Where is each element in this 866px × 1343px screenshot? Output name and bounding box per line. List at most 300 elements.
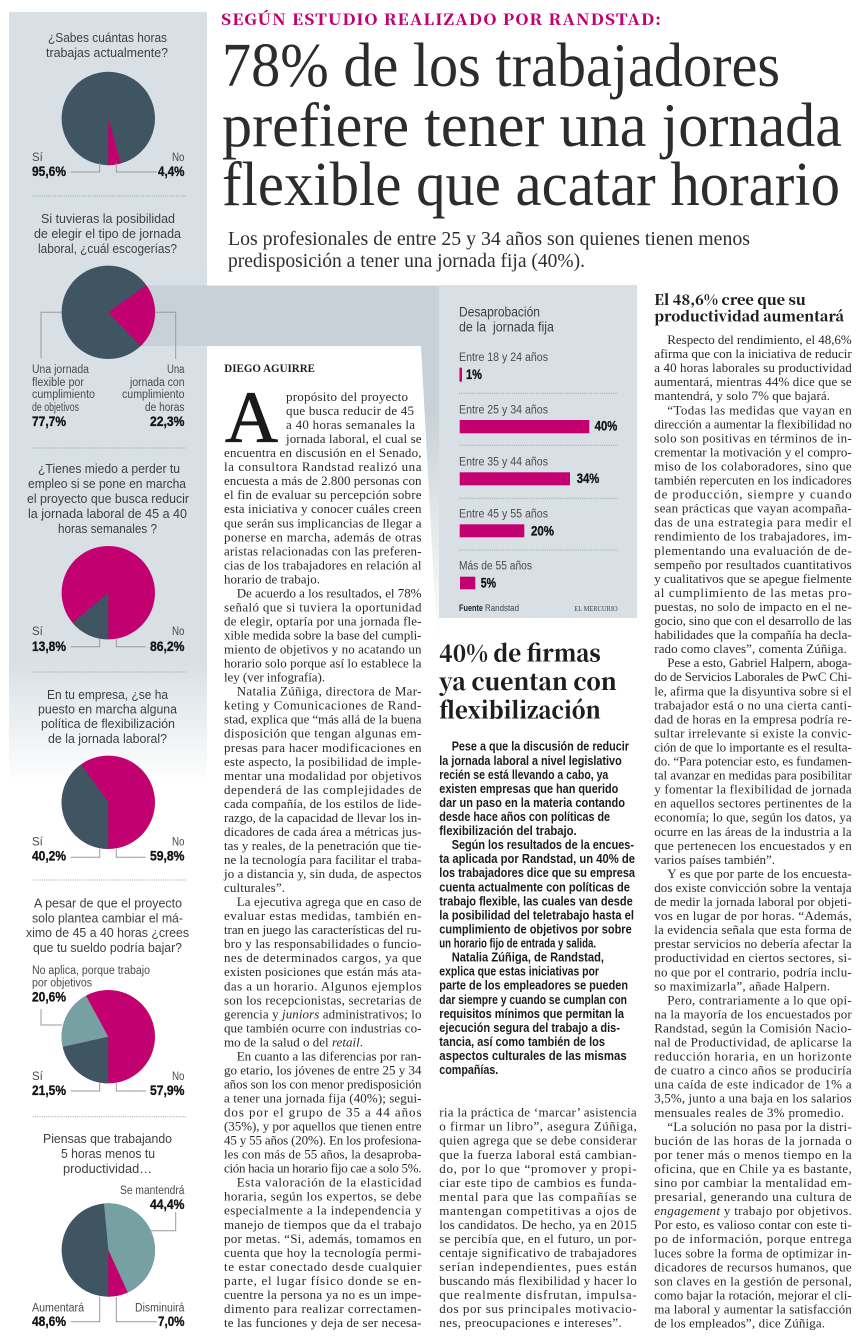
bold intro text <box>439 740 636 1077</box>
bar: 18 to 24 <box>459 352 548 382</box>
paragraph: Halpern: que pertenecen los encuestados y en <box>654 838 852 853</box>
paragraph: closing quote: sino por cambiar la mentalidad em- <box>654 1175 852 1190</box>
paragraph: quote: “Todas las medidas que vayan en <box>667 402 852 417</box>
labels pie 5: 20,6% <box>32 990 66 1005</box>
paragraph: Halpern: Pese a esto, Gabriel Halpern, aboga- <box>667 655 852 670</box>
source note: Randstad <box>485 603 519 613</box>
paragraph: quote: dirección a aumentar la flexibilidad no <box>654 416 852 431</box>
paragraph 3: mentar una modalidad por objetivos <box>224 768 422 783</box>
paragraph 4: La ejecutiva agrega que en caso de <box>237 894 422 909</box>
labels pie 4 <box>32 837 184 864</box>
paragraph 2: horario solo porque así lo establece la <box>224 656 422 671</box>
paragraph: Halpern: tal avanzar en medidas para posibilitar <box>654 768 852 783</box>
question 5 <box>26 896 189 955</box>
paragraph 3: este aspecto, la posibilidad de imple- <box>224 754 422 769</box>
paragraph: quote: sean prácticas que vayan acompaña- <box>654 501 852 516</box>
bar: over 55 <box>459 560 532 590</box>
paragraph 3: Natalia Zúñiga, directora de Mar- <box>237 684 422 699</box>
paragraph: convicción: de medir la jornada laboral por objeti- <box>654 894 852 909</box>
paragraph 6: manejo de tiempos que da el trabajo <box>224 1217 422 1232</box>
pie chart 4 <box>62 756 155 849</box>
paragraph: convicción: vos en lugar de por horas. “Además, <box>654 908 852 923</box>
paragraph: convicción: prestar servicios no debería afectar la <box>654 936 852 951</box>
paragraph 3: dependerá de las complejidades de <box>224 782 422 797</box>
paragraph 1: esta iniciativa y conocer cuáles creen <box>224 501 422 516</box>
continuation of article: ciar este tipo de cambios es funda- <box>439 1175 637 1190</box>
bar: 18 to 24: Entre 18 y 24 años <box>459 352 548 364</box>
paragraph 1 <box>224 389 422 586</box>
bold intro text: trabajo flexible, las cuales van desde <box>439 894 633 908</box>
labels pie 2: Una jornada <box>32 364 90 376</box>
survey 1: hours worked <box>32 30 184 179</box>
labels pie 1: No <box>172 152 184 164</box>
paragraph: Halpern: le, afirma que la disyuntiva sobre si el <box>654 683 852 698</box>
question 1: trabajas actualmente? <box>46 45 168 60</box>
bold intro text: Según los resultados de la encues- <box>452 838 634 852</box>
labels pie 6: 44,4% <box>150 1197 184 1212</box>
labels pie 2: de horas <box>145 402 185 414</box>
paragraph 3: keting y Comunicaciones de Rand- <box>224 698 422 713</box>
section heading: 40% de firmas: 40% de firmas <box>439 636 601 669</box>
labels pie 5: 21,5% <box>32 1083 66 1098</box>
paragraph: Comisión Nacional: de cuatro a cinco años se produciría <box>654 1063 852 1078</box>
paragraph: closing quote: como bajar la rotación, mejorar el cli- <box>654 1287 852 1302</box>
connector band from pie to bar chart panel <box>130 286 440 640</box>
bar: 45 to 55 <box>459 508 554 538</box>
subtitle: Los profesionales de entre 25 y 34 años son quienes tienen menos <box>228 228 750 250</box>
paragraph 5: go etario, los jóvenes de entre 25 y 34 <box>224 1062 422 1077</box>
bar: 35 to 44 <box>459 456 599 486</box>
question 5: que tu sueldo podría bajar? <box>33 940 182 955</box>
bold intro text: aspectos culturales de las mismas <box>439 1049 627 1063</box>
panel: left survey column background <box>9 12 207 785</box>
continuation of article: nes, preocupaciones e intereses”. <box>439 1315 622 1330</box>
bold intro text: tancia, así como también de los <box>439 1035 605 1049</box>
question 3: ¿Tienes miedo a perder tu <box>38 461 180 476</box>
paragraph 3: tas y reales, de la penetración que tie- <box>224 838 422 853</box>
paragraph: rendimiento: afirma que con la iniciativa de reducir <box>654 346 852 361</box>
article column 3 <box>654 289 852 1330</box>
pie chart 3 <box>62 546 155 639</box>
paragraph 6: parte, el lugar físico donde se en- <box>224 1273 422 1288</box>
paragraph: Halpern: sultar irrelevante si existe la convic- <box>654 725 852 740</box>
paragraph 4: que también ocurre con industrias co- <box>224 1020 422 1035</box>
paragraph: Comisión Nacional: 3,5%, junto a una baja en los salarios <box>654 1091 852 1106</box>
continuation of article: quien agrega que se debe considerar <box>439 1133 637 1148</box>
paragraph 4: gerencia y juniors administrativos; lo <box>224 1006 422 1021</box>
labels pie 3: No <box>172 626 184 638</box>
paragraph 4: evaluar estas medidas, también en- <box>224 908 422 923</box>
labels pie 2: flexible por <box>32 377 84 389</box>
paragraph: quote: das de una estrategia para medir el <box>654 515 852 530</box>
drop cap: A <box>225 377 278 458</box>
question 6: productividad… <box>63 1161 152 1176</box>
paragraph 3: presas para hacer modificaciones en <box>224 740 422 755</box>
section heading: productivity: El 48,6% cree que su <box>654 289 806 310</box>
labels pie 6: Aumentará <box>32 1303 85 1315</box>
paragraph 5: años son los con menor predisposición <box>224 1076 422 1092</box>
labels pie 2: cumplimiento <box>32 389 95 401</box>
pie chart 2 <box>62 266 155 359</box>
question 5: ximo de 45 a 40 horas ¿crees <box>26 925 189 940</box>
labels pie 6: 48,6% <box>32 1314 66 1329</box>
paragraph: Halpern: varios países también”. <box>654 852 775 867</box>
survey 5: salary <box>26 896 189 1098</box>
survey 4: flexibility policy <box>32 687 184 864</box>
paragraph 4: son los recepcionistas, secretarias de <box>224 992 422 1007</box>
paragraph 4: tran en juego las características del ru- <box>224 922 422 937</box>
paragraph: closing quote: son claves en la gestión de personal, <box>654 1273 852 1288</box>
paragraph: convicción: Y es que por parte de los encuesta- <box>667 866 852 881</box>
paragraph: Halpern: ción de que lo importante es el resulta- <box>654 740 852 754</box>
labels pie 3: 13,8% <box>32 639 66 654</box>
paragraph 3: cada compañía, de los estilos de lide- <box>224 796 422 811</box>
question 6 <box>43 1131 172 1176</box>
labels pie 6: 7,0% <box>158 1314 184 1329</box>
bar: 35 to 44: Entre 35 y 44 años <box>459 456 548 468</box>
paragraph: quote: rado como claves”, comenta Zúñiga. <box>654 641 847 656</box>
paragraph 2: miento de objetivos y no acatando un <box>224 642 422 656</box>
question 3: el proyecto que busca reducir <box>27 491 190 506</box>
bold intro text: cumplimiento de objetivos por sobre <box>439 922 632 936</box>
kicker heading: SEGÚN ESTUDIO REALIZADO POR RANDSTAD: <box>221 8 662 30</box>
paragraph 1: ponerse en marcha, además de otras <box>224 529 422 544</box>
labels pie 6: Se mantendrá <box>120 1185 185 1197</box>
labels pie 2 <box>32 312 185 429</box>
paragraph: Halpern: economía; lo que, según los datos, ya <box>654 810 852 825</box>
paragraph 5: les con más de 55 años, la desaproba- <box>224 1147 422 1162</box>
continuation of article: los candidatos. De hecho, ya en 2015 <box>439 1217 637 1232</box>
paragraph 3: razgo, de la capacidad de llevar los in- <box>224 810 422 825</box>
pie chart 1 <box>62 72 155 165</box>
question 3: la jornada laboral de 45 a 40 <box>28 506 187 521</box>
paragraph 1: el fin de evaluar su percepción sobre <box>224 487 422 502</box>
bar: 25 to 34 <box>459 404 617 434</box>
pie chart 6 <box>62 1203 155 1297</box>
bold intro text: la posibilidad del teletrabajo hasta el <box>439 908 634 922</box>
continuation of article: do, por lo que “promover y propi- <box>439 1161 637 1176</box>
question 1: ¿Sabes cuántas horas <box>48 30 167 45</box>
paragraph 3: dicadores de cada área a métricas jus- <box>224 824 422 839</box>
bold intro text: parte de los empleadores se pueden <box>439 979 628 993</box>
byline: DIEGO AGUIRRE <box>224 363 315 375</box>
survey 6: productivity <box>32 1131 185 1329</box>
question 2: de elegir el tipo de jornada <box>34 226 182 241</box>
paragraph 5: ción hacia un horario fijo cae a solo 5%. <box>224 1161 422 1176</box>
panel: bar chart disapproval of fixed schedule <box>439 285 637 618</box>
pie chart 5 <box>62 990 155 1083</box>
labels pie 5: No aplica, porque trabajo <box>32 965 150 977</box>
title: prefiere tener una jornada <box>222 92 842 160</box>
bold intro text: la jornada laboral a nivel legislativo <box>439 754 622 768</box>
paragraph 1: que busca reducir de 45 <box>286 403 414 418</box>
bold intro text: dar un paso en la materia contando <box>439 796 625 810</box>
paragraph: quote: y cualitativos que se apegue fielmente <box>654 571 852 586</box>
paragraph 5: 45 y 55 años (20%). En los profesiona- <box>224 1133 422 1148</box>
continuation of article: que realmente disfrutan, impulsa- <box>439 1287 637 1302</box>
labels pie 1: 4,4% <box>158 164 184 179</box>
paragraph: quote: puestas, no solo de impacto en el ne- <box>654 599 852 614</box>
question 3: horas semanales ? <box>58 521 157 536</box>
paragraph: quote: habilidades que la compañía ha decla- <box>654 627 852 642</box>
paragraph: Halpern: do. “Para potenciar esto, es fundamen- <box>654 754 852 768</box>
subtitle <box>228 228 750 272</box>
survey 3: fear of losing job <box>27 461 190 654</box>
paragraph: Comisión Nacional: Pero, contrariamente a lo que opi- <box>667 992 852 1007</box>
labels pie 5: por objetivos <box>32 978 92 990</box>
paragraph 4: das a un horario. Algunos ejemplos <box>224 978 422 993</box>
bold intro text: requisitos mínimos que permitan la <box>439 1007 625 1021</box>
paragraph: closing quote: “La solución no pasa por la distri- <box>667 1119 852 1134</box>
paragraph: closing quote: dicadores de recursos humanos, que <box>654 1259 852 1274</box>
labels pie 4: Sí <box>32 837 44 849</box>
paragraph 6: especialmente a la independencia y <box>224 1203 422 1218</box>
paragraph 6: cuenta que hoy la tecnología permi- <box>224 1245 422 1260</box>
labels pie 2: de objetivos <box>32 402 79 414</box>
bold intro text: un horario fijo de entrada y salida. <box>439 936 596 950</box>
labels pie 2: Una <box>167 364 185 376</box>
labels pie 1: Sí <box>32 152 44 164</box>
bold intro text: cuenta actualmente con políticas de <box>439 880 630 894</box>
section heading: productivity: productividad aumentará <box>654 306 844 327</box>
source note <box>459 603 618 613</box>
paragraph: convicción: so maximizarla”, añade Halpern. <box>654 978 830 993</box>
paragraph 3: stad, explica que “más allá de la buena <box>224 712 422 727</box>
paragraph 6: dimento para realizar correctamen- <box>224 1301 422 1316</box>
paragraph 5: dos por el grupo de 35 a 44 años <box>224 1104 422 1120</box>
paragraph 6: por metas. “Si, además, tomamos en <box>224 1231 422 1246</box>
paragraph 2: xible medida sobre la base del cumpli- <box>224 628 422 642</box>
paragraph 2: de elegir, optaría por una jornada fle- <box>224 614 422 628</box>
question 2: laboral, ¿cuál escogerías? <box>38 241 177 256</box>
paragraph: quote: sempeño por resultados cuantitativos <box>654 557 852 572</box>
subtitle: predisposición a tener una jornada fija (40%). <box>228 250 585 272</box>
bold intro text: ta aplicada por Randstad, un 40% de <box>439 852 635 866</box>
question 1 <box>46 30 168 60</box>
question 4: de la jornada laboral? <box>48 731 167 746</box>
paragraph: Comisión Nacional: reducción horaria, en un horizonte <box>654 1049 852 1064</box>
question 6: 5 horas menos tu <box>61 1146 155 1161</box>
question 4 <box>38 687 178 746</box>
bold intro text: Natalia Zúñiga, de Randstad, <box>452 951 604 965</box>
paragraph: quote <box>654 402 852 656</box>
paragraph: rendimiento: mantendrá, y solo 7% que bajará. <box>654 388 830 403</box>
bold intro text: existen empresas que han querido <box>439 782 619 796</box>
bold intro text: explica que estas iniciativas por <box>439 965 599 979</box>
paragraph: Halpern: ocurre en las áreas de la industria a la <box>654 824 852 839</box>
continuation of article: ria la práctica de ‘marcar’ asistencia <box>439 1105 637 1120</box>
paragraph: closing quote: oficina, que en Chile ya es bastante, <box>654 1161 852 1176</box>
continuation of article: o firmar un libro”, asegura Zúñiga, <box>439 1119 637 1134</box>
labels pie 6: Disminuirá <box>135 1303 185 1315</box>
paragraph 6: te estar conectado desde cualquier <box>224 1259 422 1274</box>
paragraph: closing quote: por tener más o menos tiempo en la <box>654 1147 852 1162</box>
paragraph: Halpern <box>654 655 852 867</box>
question 5: solo plantea cambiar el má- <box>32 911 183 926</box>
bar: 45 to 55: Entre 45 y 55 años <box>459 508 548 520</box>
paragraph 6: te las funciones y deja de ser necesa- <box>224 1315 422 1330</box>
paragraph 1: la consultora Randstad realizó una <box>224 459 422 474</box>
paragraph: convicción: la evidencia señala que esta forma de <box>654 922 852 937</box>
paragraph 3 <box>223 684 422 895</box>
paragraph: Comisión Nacional <box>654 992 852 1120</box>
labels pie 5: No <box>172 1071 184 1083</box>
bold intro text: los trabajadores dice que su empresa <box>439 866 636 880</box>
continuation of article: centaje significativo de trabajadores <box>439 1245 637 1260</box>
labels pie 2: cumplimiento <box>122 389 184 401</box>
paragraph: Halpern: en aquellos sectores pertinentes de la <box>654 796 852 811</box>
section heading: 40% de firmas <box>438 636 617 725</box>
paragraph: closing quote: ma laboral y aumentar la satisfacción <box>654 1302 852 1316</box>
question 2 <box>34 211 182 256</box>
paragraph: quote: rendimiento de los trabajadores, im- <box>654 529 852 544</box>
paragraph 3: culturales”. <box>224 880 285 895</box>
paragraph: convicción: no que por el contrario, podría inclu- <box>654 964 852 979</box>
question 4: puesto en marcha alguna <box>38 702 178 717</box>
paragraph 2: De acuerdo a los resultados, el 78% <box>237 585 422 600</box>
paragraph 4 <box>224 894 422 1049</box>
continuation of article: que la fuerza laboral está cambian- <box>439 1147 637 1162</box>
paragraph: rendimiento: Respecto del rendimiento, el 48,6% <box>667 332 852 347</box>
paragraph: quote: de producción, siempre y cuando <box>654 487 852 502</box>
paragraph: quote: también repercuten en los indicadores <box>654 472 852 488</box>
question 4: política de flexibilización <box>41 716 175 731</box>
section heading: 40% de firmas: flexibilización <box>439 692 601 725</box>
survey 2: preferred schedule <box>32 211 185 429</box>
paragraph 1: encuentra en discusión en el Senado, <box>224 445 422 460</box>
labels pie 4: 59,8% <box>150 849 184 864</box>
question 2: Si tuvieras la posibilidad <box>41 211 175 226</box>
article column 1 <box>223 363 422 1330</box>
paragraph 2: señaló que si tuviera la oportunidad <box>224 600 422 614</box>
bold intro text: recién se está llevando a cabo, ya <box>439 768 609 782</box>
paragraph: convicción <box>654 866 852 993</box>
paragraph 1: propósito del proyecto <box>286 389 408 404</box>
title <box>222 32 842 219</box>
paragraph: Comisión Nacional: mensuales reales de 3% promedio. <box>654 1105 844 1120</box>
labels pie 4: 40,2% <box>32 849 66 864</box>
labels pie 3: 86,2% <box>150 639 184 654</box>
bar chart title: de la jornada fija <box>459 320 554 335</box>
question 6: Piensas que trabajando <box>43 1131 172 1146</box>
continuation of article: mental para que las compañías se <box>439 1189 637 1204</box>
bold intro text: compañías. <box>439 1063 498 1077</box>
paragraph 6: Esta valoración de la elasticidad <box>237 1175 422 1190</box>
paragraph 4: nes de determinados cargos, ya que <box>224 950 422 965</box>
labels pie 2: jornada con <box>129 377 184 389</box>
bold intro text: Pese a que la discusión de reducir <box>452 740 629 754</box>
paragraph: closing quote: luces sobre la forma de optimizar in- <box>654 1245 852 1260</box>
paragraph 4: mo de la salud o del retail. <box>224 1034 363 1049</box>
bar: 45 to 55: 20% <box>531 523 554 538</box>
paragraph 5: a tener una jornada fija (40%); segui- <box>224 1090 422 1106</box>
paragraph 5 <box>224 1048 422 1176</box>
paragraph 1: encuesta a más de 2.800 personas con <box>224 473 422 488</box>
paragraph: closing quote: bución de las horas de la jornada o <box>654 1133 852 1148</box>
paragraph: closing quote: de los empleados”, dice Zúñiga. <box>654 1316 825 1330</box>
paragraph 3: disposición que tengan algunas em- <box>224 726 422 741</box>
question 3 <box>27 461 190 536</box>
source note: EL MERCURIO <box>574 604 618 613</box>
paragraph 6: cuentre la persona ya no es un impe- <box>224 1287 422 1302</box>
paragraph: closing quote <box>654 1119 852 1330</box>
continuation of article <box>439 1105 637 1330</box>
paragraph: quote: plementando una evaluación de de- <box>654 543 852 558</box>
labels pie 2: 22,3% <box>150 414 184 429</box>
paragraph: Halpern: trabajador está o no una cierta canti- <box>654 697 852 712</box>
section heading: productivity <box>654 289 844 327</box>
title: flexible que acatar horario <box>222 151 840 219</box>
paragraph 1: aristas relacionadas con las preferen- <box>224 543 422 558</box>
labels pie 1: 95,6% <box>32 164 66 179</box>
question 5: A pesar de que el proyecto <box>34 896 182 911</box>
section heading: 40% de firmas: ya cuentan con <box>438 664 617 697</box>
paragraph 2 <box>224 585 422 685</box>
labels pie 3: Sí <box>32 626 44 638</box>
paragraph 1: a 40 horas semanales la <box>286 417 415 432</box>
paragraph: closing quote: po de información, porque entrega <box>654 1231 852 1246</box>
paragraph: quote: solo son positivas en términos de in- <box>654 430 852 445</box>
continuation of article: mantengan competitivas a ojos de <box>439 1203 637 1218</box>
continuation of article: buscando más flexibilidad y hacer lo <box>439 1273 637 1288</box>
bar chart title: Desaprobación <box>459 305 540 320</box>
bar: 35 to 44: 34% <box>577 471 599 486</box>
bold intro text: ejecución segura del trabajo a dis- <box>439 1021 620 1035</box>
labels pie 5: Sí <box>32 1071 44 1083</box>
bar: over 55: Más de 55 años <box>459 560 532 572</box>
paragraph: closing quote: Por esto, es valioso contar con este ti- <box>654 1217 852 1232</box>
paragraph: closing quote: presarial, generando una cultura de <box>654 1189 852 1204</box>
paragraph: rendimiento: aumentará, mientras 44% dice que se <box>654 374 852 389</box>
source note: Fuente <box>459 603 483 613</box>
labels pie 2: 77,7% <box>32 414 66 429</box>
labels pie 5: 57,9% <box>150 1083 184 1098</box>
labels pie 5 <box>32 965 184 1098</box>
paragraph: convicción: dos existe convicción sobre la ventaja <box>654 880 852 895</box>
paragraph 6: horaria, según los expertos, se debe <box>224 1189 422 1204</box>
question 3: empleo si se pone en marcha <box>28 476 187 491</box>
continuation of article: dos por sus principales motivacio- <box>439 1301 637 1316</box>
labels pie 1 <box>32 152 184 179</box>
paragraph 1: cias de los trabajadores en relación al <box>224 557 422 572</box>
paragraph 5: (35%), y por aquellos que tienen entre <box>224 1119 422 1134</box>
continuation of article: serían independientes, pues están <box>439 1259 637 1274</box>
paragraph: Halpern: do de Servicios Laborales de PwC Chi- <box>654 669 852 684</box>
paragraph: rendimiento <box>654 332 852 403</box>
paragraph: convicción: productividad en ciertos sectores, si- <box>654 950 852 965</box>
paragraph: Comisión Nacional: na la mayoría de los encuestados por <box>654 1006 852 1021</box>
bar: over 55: 5% <box>481 575 496 590</box>
article column 2 <box>438 636 637 1330</box>
bar chart title <box>459 305 554 335</box>
paragraph 4: bro y las responsabilidades o funcio- <box>224 936 422 951</box>
bar: 25 to 34: 40% <box>595 419 617 434</box>
paragraph: Halpern: dad de horas en la empresa podría re- <box>654 711 852 726</box>
paragraph: Comisión Nacional: Randstad, según la Comisión Nacio- <box>654 1020 852 1036</box>
paragraph 1: jornada laboral, el cual se <box>285 431 422 446</box>
paragraph: quote: al cumplimiento de las metas pro- <box>654 585 852 600</box>
paragraph 1: que serán sus implicancias de llegar a <box>224 515 422 530</box>
paragraph 1: horario de trabajo. <box>224 571 320 586</box>
title: 78% de los trabajadores <box>222 32 780 100</box>
paragraph: Halpern: y fomentar la flexibilidad de jornada <box>654 782 852 797</box>
paragraph 3: ne la tecnología para facilitar el traba- <box>224 852 422 867</box>
paragraph: quote: gocio, sino que con el desarrollo de las <box>654 613 852 628</box>
labels pie 3 <box>32 626 184 654</box>
continuation of article: se percibía que, en el futuro, un por- <box>439 1231 637 1246</box>
paragraph: quote: crementar la motivación y el compro- <box>654 444 852 459</box>
bar: 18 to 24: 1% <box>466 367 482 382</box>
